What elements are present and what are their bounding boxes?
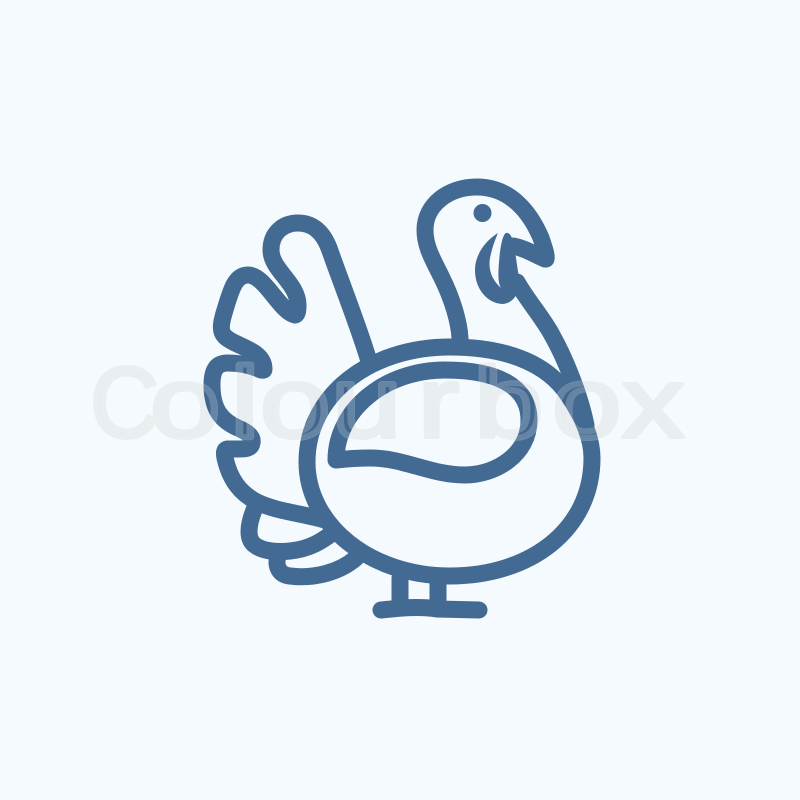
body ring: [307, 347, 592, 576]
foot: [381, 607, 479, 610]
lower feather one: [249, 510, 334, 551]
icon: turkey: [212, 187, 592, 610]
watermark: olourbox: [150, 347, 684, 458]
watermark: olourbox: [150, 347, 684, 458]
beak underside: [513, 246, 545, 259]
watermark: C: [90, 347, 159, 459]
right leg: [430, 578, 446, 604]
tail fan: [212, 223, 368, 520]
neck front: [517, 282, 586, 425]
left leg: [392, 578, 408, 604]
watermark: C: [90, 347, 159, 459]
wing: [336, 370, 529, 475]
neck and head outline: [425, 187, 546, 338]
wattle: [475, 233, 520, 304]
eye: [474, 204, 492, 222]
lower feather two: [277, 556, 356, 577]
